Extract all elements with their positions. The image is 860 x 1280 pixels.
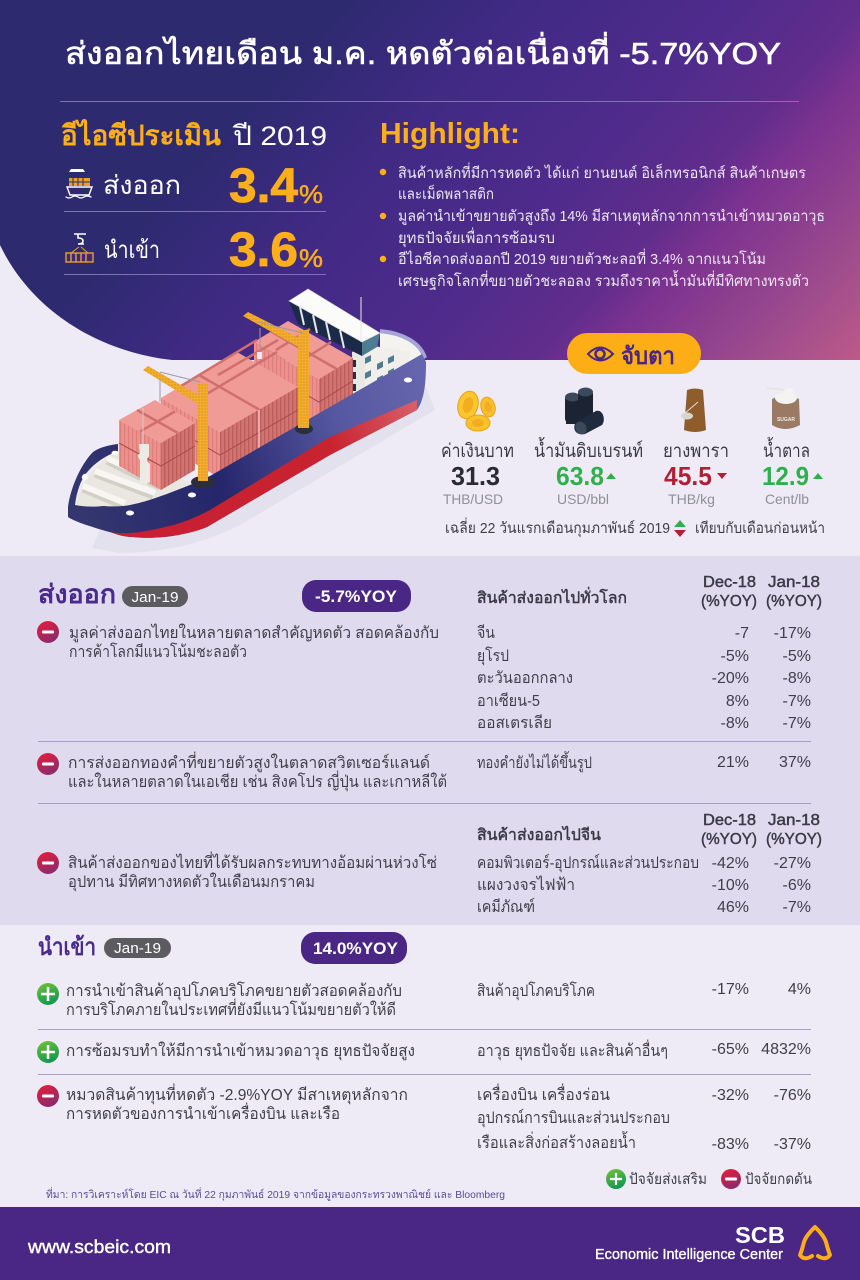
badge: watch: จับตา (621, 343, 675, 370)
note: averaging period: เทียบกับเดือนก่อนหน้า (695, 520, 825, 537)
item: rubber: THB/kg (668, 491, 715, 507)
table: capital goods: เรือและสิ่งก่อสร้างลอยน้ำ (477, 1131, 636, 1152)
crane: front (143, 366, 215, 488)
item: baht: ค่าเงินบาท (441, 441, 514, 462)
icon: negative factor (37, 852, 59, 874)
heading: EIC forecast: ปี 2019 (232, 121, 327, 151)
highlight bullet 1 (380, 162, 806, 203)
table row: consumer goods: สินค้าอุปโภคบริโภค (477, 981, 595, 1001)
badge: Jan-19 (122, 586, 188, 607)
text: consumer goods (66, 981, 402, 1019)
table header: world exports: (%YOY) (701, 593, 757, 610)
table: world exports: ตะวันออกกลาง (477, 670, 573, 687)
table header: world exports (477, 574, 822, 610)
heading: exports: ส่งออก (38, 579, 116, 609)
icon: coins (455, 389, 497, 431)
header gradient panel (0, 0, 860, 360)
text: capital goods: หมวดสินค้าทุนที่หดตัว -2.9%YOY มีสาเหตุหลักจาก (66, 1083, 408, 1105)
brand name: Economic Intelligence Center (595, 1246, 783, 1263)
table: world exports: จีน (477, 624, 495, 642)
table header: exports to China: (%YOY) (701, 831, 757, 848)
table: world exports: -7 (735, 625, 749, 642)
table: world exports: -8% (783, 670, 811, 687)
panel: imports (37, 932, 812, 1201)
table: world exports: -8% (721, 715, 749, 732)
text: consumer goods: การบริโภคภายในประเทศที่ยังมีแนวโน้มขยายตัวให้ดี (66, 998, 396, 1019)
badge: watch (567, 333, 701, 374)
item: sugar: น้ำตาล (763, 437, 810, 462)
icon: positive factor (37, 983, 59, 1005)
table row: weapons: อาวุธ ยุทธปัจจัย และสินค้าอื่นๆ (477, 1039, 668, 1061)
table header: world exports: สินค้าส่งออกไปทั่วโลก (477, 587, 627, 607)
table: world exports (477, 624, 811, 732)
highlight bullet 2 (380, 208, 825, 248)
badge: Jan-19 (104, 938, 171, 958)
text: consumer goods: การนำเข้าสินค้าอุปโภคบริโภคขยายตัวสอดคล้องกับ (66, 981, 402, 1001)
icon: sugar bag (767, 388, 800, 429)
brand name (595, 1222, 785, 1263)
table: world exports: -20% (712, 670, 749, 687)
table header: exports to China: (%YOY) (766, 831, 822, 848)
icon: rubber tree (681, 388, 706, 432)
table: world exports: -17% (774, 625, 811, 642)
text: gold exports: และในหลายตลาดในเอเชีย เช่น สิงคโปร ญี่ปุ่น และเกาหลีใต้ (68, 770, 447, 792)
table: exports to China: -6% (783, 877, 811, 894)
table header: world exports: Dec-18 (703, 574, 756, 591)
table header: exports to China: Jan-18 (768, 812, 820, 829)
table: exports to China: -7% (783, 899, 811, 916)
value: import 3.6%: % (299, 245, 323, 273)
panel: exports (0, 556, 860, 925)
table row: consumer goods (477, 981, 811, 1001)
heading: imports: นำเข้า (38, 934, 96, 961)
table header: exports to China: สินค้าส่งออกไปจีน (477, 826, 601, 844)
note: averaging period: เฉลี่ย 22 วันแรกเดือนกุมภาพันธ์ 2019 (445, 517, 670, 538)
value: export 3.4%: % (299, 181, 323, 209)
text: military exercise: การซ้อมรบทำให้มีการนำเข้าหมวดอาวุธ ยุทธปัจจัยสูง (66, 1041, 415, 1061)
table: capital goods (477, 1083, 811, 1153)
value: import 3.6%: 3.6 (229, 224, 298, 277)
highlight bullet 3: อีไอซีคาดส่งออกปี 2019 ขยายตัวชะลอที่ 3.4% จากแนวโน้ม (398, 248, 766, 268)
note: averaging period (445, 517, 825, 538)
text: gold exports (68, 751, 447, 792)
table: capital goods: อุปกรณ์การบินและส่วนประกอบ (477, 1108, 670, 1128)
table row: consumer goods: -17% (712, 981, 749, 998)
table: capital goods: -32% (712, 1087, 749, 1104)
table: capital goods: เครื่องบิน เครื่องร่อน (477, 1083, 610, 1104)
panel: watch list (441, 333, 825, 538)
badge: -5.7%YOY: -5.7%YOY (315, 587, 398, 606)
table: world exports: -7% (783, 693, 811, 710)
title: ส่งออกไทยเดือน ม.ค. หดตัวต่อเนื่องที่ -5.7%YOY (65, 32, 781, 71)
text: gold exports: การส่งออกทองคำที่ขยายตัวสูงในตลาดสวิตเซอร์แลนด์ (68, 751, 430, 773)
icon: eye (588, 348, 613, 360)
icon: negative factor (37, 753, 59, 775)
badge: 14.0%YOY (301, 932, 407, 964)
table: capital goods: -37% (774, 1136, 811, 1153)
item: brent oil: USD/bbl (557, 491, 609, 507)
table: exports to China: -27% (774, 855, 811, 872)
icon: positive factor (37, 1041, 59, 1063)
table: exports to China: แผงวงจรไฟฟ้า (477, 875, 575, 894)
table: exports to China (477, 853, 811, 916)
table header: exports to China: Dec-18 (703, 812, 756, 829)
badge: Jan-19: Jan-19 (132, 589, 178, 606)
item: brent oil (534, 437, 643, 507)
table: exports to China: เคมีภัณฑ์ (477, 897, 535, 916)
badge: -5.7%YOY (302, 580, 411, 612)
item: rubber (663, 441, 729, 507)
text: weak exports (69, 623, 439, 661)
table: world exports: -7% (783, 715, 811, 732)
item: rubber: 45.5 (664, 461, 712, 491)
item: baht: 31.3 (451, 461, 500, 491)
value: export 3.4%: 3.4 (229, 160, 298, 213)
text: supply chain: อุปทาน มีทิศทางหดตัวในเดือนมกราคม (68, 872, 315, 892)
brand name: SCB (735, 1222, 785, 1248)
legend: ปัจจัยส่งเสริม (629, 1171, 707, 1188)
badge: 14.0%YOY: 14.0%YOY (313, 939, 399, 958)
table header: world exports: Jan-18 (768, 574, 820, 591)
footer (0, 1207, 860, 1280)
table: exports to China: คอมพิวเตอร์-อุปกรณ์และส่วนประกอบ (477, 853, 699, 873)
table row: weapons: 4832% (761, 1041, 811, 1058)
icon: negative factor (37, 1085, 59, 1107)
website: www.scbeic.com (27, 1237, 171, 1257)
item: sugar: 12.9 (762, 461, 809, 491)
containers: rear stack (254, 321, 353, 425)
bow mast (138, 408, 150, 484)
table: exports to China: -10% (712, 877, 749, 894)
ship deck at bow (75, 451, 205, 507)
legend: ปัจจัยกดดัน (745, 1171, 812, 1188)
item: brent oil: น้ำมันดิบเบรนท์ (534, 437, 643, 462)
badge: Jan-19: Jan-19 (114, 940, 161, 957)
table: world exports: ยุโรป (477, 646, 509, 666)
text: weak exports: มูลค่าส่งออกไทยในหลายตลาดสำคัญหดตัว สอดคล้องกับ (69, 623, 439, 643)
label: export: ส่งออก (103, 170, 181, 200)
source note: ที่มา: การวิเคราะห์โดย EIC ณ วันที่ 22 กุมภาพันธ์ 2019 จากข้อมูลของกระทรวงพาณิชย์ และ Bloomberg (46, 1187, 505, 1201)
table row: unwrought gold: ทองคำยังไม่ได้ขึ้นรูป (477, 751, 592, 773)
table row: weapons (477, 1039, 811, 1061)
table: capital goods: -83% (712, 1136, 749, 1153)
icon: cargo ship (66, 169, 92, 198)
item: baht: THB/USD (443, 491, 503, 507)
highlight bullet 1: และเม็ดพลาสติก (398, 184, 494, 203)
text: capital goods (66, 1083, 408, 1123)
item: sugar (762, 437, 823, 507)
item: sugar: Cent/lb (765, 491, 809, 507)
table row: unwrought gold: 21% (717, 754, 749, 771)
illustration: container ship (68, 289, 435, 553)
table: capital goods: -76% (774, 1087, 811, 1104)
highlight bullet 2: ยุทธปัจจัยเพื่อการซ้อมรบ (398, 227, 555, 248)
ship hull (68, 354, 426, 538)
logo: SCB bell (800, 1227, 830, 1258)
text: weak exports: การค้าโลกมีแนวโน้มชะลอตัว (69, 642, 247, 661)
heading: Highlight: Highlight: (380, 118, 520, 150)
text: capital goods: การหดตัวของการนำเข้าเครื่องบิน และเรือ (66, 1102, 340, 1123)
table: world exports: -5% (721, 648, 749, 665)
table row: consumer goods: 4% (788, 981, 811, 998)
table header: world exports: (%YOY) (766, 593, 822, 610)
table row: weapons: -65% (712, 1041, 749, 1058)
label: import: นำเข้า (104, 237, 160, 264)
highlight bullet 1: สินค้าหลักที่มีการหดตัว ได้แก่ ยานยนต์ อิเล็กทรอนิกส์ สินค้าเกษตร (398, 162, 806, 182)
panel: EIC forecast 2019 (61, 119, 327, 277)
panel: highlight (380, 118, 825, 290)
table: world exports: อาเซียน-5 (477, 692, 540, 710)
crane: rear (243, 312, 313, 434)
icon: container crane hook (66, 234, 93, 262)
heading: EIC forecast: อีไอซีประเมิน (61, 119, 221, 151)
table header: exports to China (477, 812, 822, 848)
item: brent oil: 63.8 (556, 461, 604, 491)
text: supply chain (68, 851, 437, 892)
icon: sugar bag: SUGAR (777, 417, 795, 423)
table: world exports: -5% (783, 648, 811, 665)
table row: unwrought gold (477, 751, 811, 773)
table: exports to China: -42% (712, 855, 749, 872)
highlight bullet 2: มูลค่านำเข้าขยายตัวสูงถึง 14% มีสาเหตุหลักจากการนำเข้าหมวดอาวุธ (398, 208, 825, 226)
icon: oil barrels (565, 388, 604, 436)
icon: negative factor (37, 621, 59, 643)
table: exports to China: 46% (717, 899, 749, 916)
ship superstructure (289, 289, 425, 405)
item: rubber: ยางพารา (663, 441, 729, 462)
highlight bullet 3 (380, 248, 809, 290)
table row: unwrought gold: 37% (779, 754, 811, 771)
highlight bullet 3: เศรษฐกิจโลกที่ขยายตัวชะลอลง รวมถึงราคาน้ำมันที่มีทิศทางทรงตัว (398, 270, 809, 290)
text: supply chain: สินค้าส่งออกของไทยที่ได้รับผลกระทบทางอ้อมผ่านห่วงโซ่ (68, 851, 437, 872)
legend (606, 1169, 812, 1189)
item: baht (441, 441, 514, 507)
containers: front stack (119, 400, 195, 490)
table: world exports: ออสเตรเลีย (477, 714, 552, 732)
heading: EIC forecast (61, 119, 327, 151)
containers: middle stack (161, 340, 298, 478)
table: world exports: 8% (726, 693, 749, 710)
